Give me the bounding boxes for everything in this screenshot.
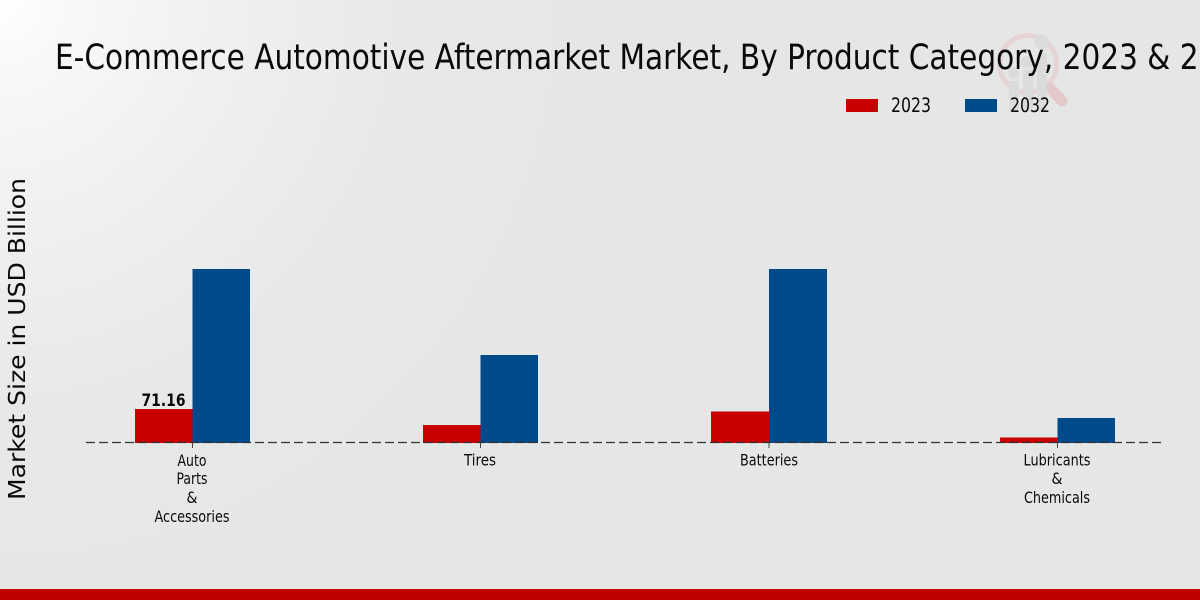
category label: Lubricants & Chemicals xyxy=(1024,450,1090,507)
bars: Batteries xyxy=(711,269,827,443)
category label: Lubricants & Chemicals: Lubricants xyxy=(1024,450,1090,470)
category label: Batteries: Batteries xyxy=(740,450,798,470)
bars: Tires xyxy=(423,355,538,443)
category label: Tires: Tires xyxy=(463,450,496,470)
legend xyxy=(846,94,1050,117)
legend: 2032: 2032 xyxy=(1010,94,1050,117)
footer bar xyxy=(0,589,1200,600)
category label: Lubricants & Chemicals: Chemicals xyxy=(1024,488,1090,507)
category label: Auto Parts & Accessories: Parts xyxy=(176,469,208,488)
category label: Auto Parts & Accessories xyxy=(154,451,230,526)
bars: Lubricants & Chemicals xyxy=(1000,418,1115,443)
category label: Auto Parts & Accessories: & xyxy=(186,488,198,507)
y axis label: Market Size in USD Billion xyxy=(5,178,31,500)
bars: Auto Parts & Accessories xyxy=(135,269,250,443)
watermark logo xyxy=(1000,34,1062,112)
category label: Auto Parts & Accessories: Accessories xyxy=(154,507,230,526)
axis baseline xyxy=(86,442,1164,444)
legend: 2032 xyxy=(965,94,1050,117)
category label: Lubricants & Chemicals: & xyxy=(1052,469,1062,488)
category label: Auto Parts & Accessories: Auto xyxy=(178,451,206,470)
bar chart xyxy=(86,269,1164,448)
legend: 2023: 2023 xyxy=(891,94,931,117)
axis ticks xyxy=(192,443,1058,448)
value label: 71.16 xyxy=(142,391,186,410)
legend: 2023 xyxy=(846,94,931,117)
